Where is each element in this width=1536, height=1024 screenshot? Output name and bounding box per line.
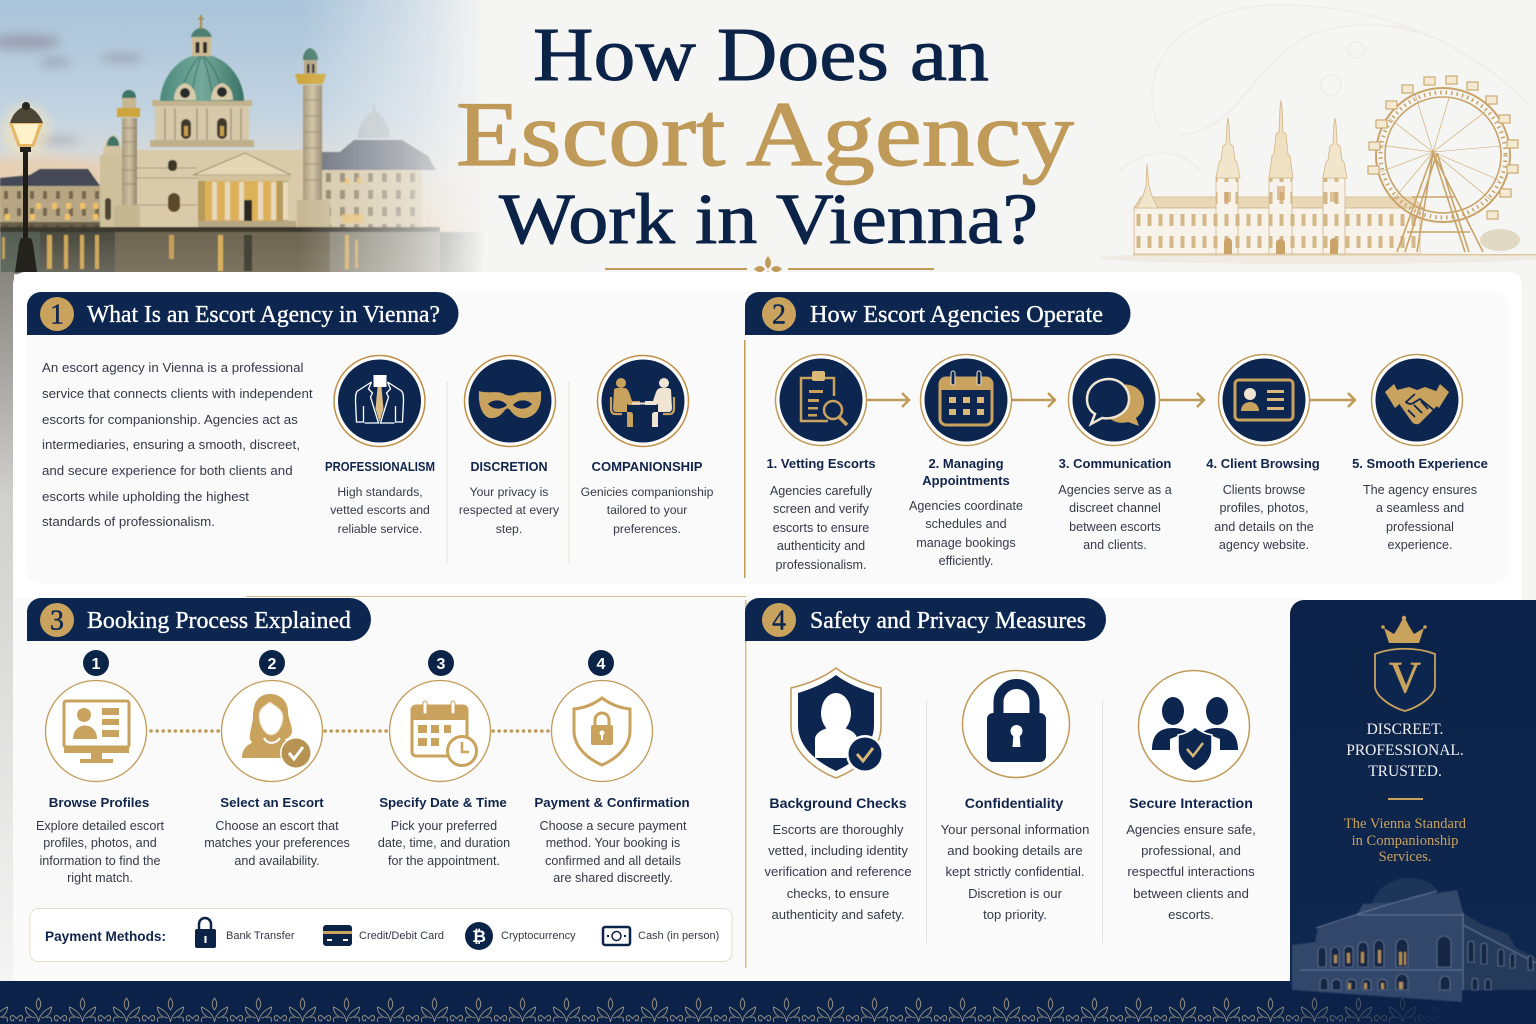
icon: shield with person — [791, 668, 884, 778]
intro paragraph: and secure experience for both clients and — [42, 463, 293, 478]
arrow — [866, 393, 909, 407]
step: select an escort — [204, 650, 350, 868]
icon: banknote — [603, 927, 630, 945]
feature: discretion: respected at every — [459, 503, 560, 517]
feature: professionalism: PROFESSIONALISM — [325, 459, 435, 474]
tagline: TRUSTED. — [1368, 763, 1442, 780]
measure: secure interaction: Agencies ensure safe, — [1126, 822, 1256, 837]
right palace — [322, 170, 422, 228]
step 1: vetting escorts: professionalism. — [776, 558, 866, 572]
icon: padlock — [195, 918, 216, 948]
step: browse profiles: Browse Profiles — [49, 795, 149, 810]
measure: secure interaction: between clients and — [1133, 886, 1249, 901]
step: payment and confirmation: are shared discreetly. — [553, 871, 673, 885]
step 1: vetting escorts: 1. Vetting Escorts — [766, 456, 876, 471]
payment methods box — [30, 908, 732, 962]
measure: confidentiality — [941, 670, 1089, 922]
gold subtitle — [1344, 816, 1467, 865]
intro paragraph: escorts while upholding the highest — [42, 489, 249, 504]
intro paragraph: standards of professionalism. — [42, 514, 215, 529]
icon: two people at table — [598, 356, 688, 446]
feature: professionalism — [325, 356, 435, 536]
step: select an escort: and availability. — [234, 854, 320, 868]
intro paragraph: An escort agency in Vienna is a professional — [42, 360, 303, 375]
section 2 heading: 2 — [772, 300, 786, 330]
icon: clipboard — [776, 354, 866, 446]
measure: confidentiality: and booking details are — [947, 843, 1083, 858]
water with reflections — [0, 232, 500, 274]
step 5: smooth experience: experience. — [1387, 538, 1453, 552]
step 5: smooth experience: 5. Smooth Experience — [1352, 456, 1488, 471]
section 4 heading — [745, 598, 1106, 641]
step: specify date and time: date, time, and duration — [378, 836, 510, 850]
icon: calendar and clock — [390, 680, 490, 782]
step 5: smooth experience: professional — [1386, 520, 1454, 534]
measure: secure interaction — [1126, 670, 1256, 922]
step 1: vetting escorts: Agencies carefully — [770, 484, 873, 498]
step: select an escort: 2 — [268, 656, 277, 673]
panel: section 4 — [745, 598, 1256, 968]
intro paragraph — [42, 360, 313, 529]
title: Work in Vienna? — [499, 179, 1038, 259]
ferris wheel — [1372, 88, 1510, 252]
gold subtitle: Services. — [1379, 849, 1431, 865]
step: payment and confirmation: Payment & Confirmation — [534, 795, 690, 810]
wheel cabins — [1368, 76, 1518, 219]
night palace illustration — [1292, 878, 1536, 1002]
step 4: client browsing: Clients browse — [1223, 483, 1305, 497]
rathaus building — [1134, 100, 1423, 254]
feature: companionship: preferences. — [613, 522, 681, 536]
quay — [0, 227, 440, 232]
left edge shade — [0, 272, 14, 982]
step 2: managing appointments: Agencies coordinate — [909, 499, 1023, 513]
intro paragraph: escorts for companionship. Agencies act as — [42, 412, 298, 427]
title — [456, 13, 1074, 259]
city line art: Rathaus and Riesenrad — [1100, 5, 1536, 264]
bottom ornamental band — [0, 981, 1536, 1024]
step 3: communication: Agencies serve as a — [1058, 483, 1172, 497]
drum — [154, 106, 250, 140]
section 3 heading — [27, 598, 371, 641]
step 3: communication: and clients. — [1083, 538, 1147, 552]
arrow — [1011, 393, 1055, 407]
step: payment and confirmation: Choose a secure payment — [539, 819, 687, 833]
icon: monitor profile — [46, 680, 146, 782]
dome — [160, 54, 244, 101]
measure: secure interaction: respectful interactions — [1127, 864, 1255, 879]
arrow — [1310, 393, 1355, 407]
payment methods box: Cryptocurrency — [501, 930, 576, 942]
title: Escort Agency — [456, 83, 1074, 185]
lower panel background — [13, 598, 1303, 982]
step 3: communication: between escorts — [1069, 520, 1161, 534]
feature: companionship: COMPANIONSHIP — [592, 459, 703, 474]
tagline: PROFESSIONAL. — [1346, 742, 1464, 759]
main card — [13, 272, 1522, 984]
step: browse profiles — [36, 650, 165, 885]
step: browse profiles: 1 — [92, 656, 101, 673]
icon: crown — [1381, 616, 1427, 643]
measure: confidentiality: top priority. — [983, 907, 1047, 922]
step 5: smooth experience: The agency ensures — [1363, 483, 1477, 497]
icon: bitcoin — [465, 922, 493, 950]
payment methods box: Credit/Debit Card — [359, 930, 444, 942]
icon: padlock — [962, 670, 1070, 778]
icon: shield with lock — [552, 680, 652, 782]
feature: discretion: step. — [496, 522, 522, 536]
step 2: managing appointments — [909, 354, 1023, 568]
step: specify date and time: for the appointment. — [388, 854, 500, 868]
ground haze — [1100, 252, 1536, 264]
feature: professionalism: High standards, — [337, 485, 423, 499]
icon: id card — [1218, 354, 1310, 446]
section 2 heading — [745, 292, 1130, 335]
feature: discretion: Your privacy is — [470, 485, 548, 499]
feature: companionship: Genicies companionship — [581, 485, 714, 499]
measure: secure interaction: Secure Interaction — [1129, 796, 1253, 812]
step: select an escort: Choose an escort that — [215, 819, 339, 833]
feature: professionalism: reliable service. — [338, 522, 422, 536]
title: How Does an — [533, 13, 989, 97]
step: select an escort: matches your preferences — [204, 836, 350, 850]
measure: background checks: checks, to ensure — [787, 886, 889, 901]
measure: confidentiality: kept strictly confidential. — [946, 864, 1084, 879]
photo: Karlskirche at dusk — [0, 0, 500, 274]
step 1: vetting escorts: escorts to ensure — [773, 521, 869, 535]
tagline: DISCREET. — [1367, 721, 1443, 738]
payment methods box: Cash (in person) — [638, 930, 719, 942]
gold subtitle: The Vienna Standard — [1344, 816, 1467, 832]
section 3 heading: Booking Process Explained — [87, 608, 351, 634]
portico — [193, 153, 291, 175]
step 4: client browsing: profiles, photos, — [1220, 501, 1308, 515]
panel: brand sidebar — [1290, 600, 1536, 1002]
icon: V shield crest: V — [1389, 653, 1421, 702]
measure: secure interaction: professional, and — [1141, 843, 1241, 858]
connector dots — [325, 729, 388, 733]
lantern — [192, 37, 211, 56]
step: browse profiles: profiles, photos, and — [43, 836, 157, 850]
step 2: managing appointments: 2. Managing — [928, 456, 1004, 471]
step 4: client browsing: and details on the — [1214, 520, 1314, 534]
icon: speech bubbles — [1068, 354, 1160, 446]
title ornament — [605, 256, 934, 282]
upper panel background — [27, 292, 1508, 584]
step: specify date and time: Pick your preferred — [391, 819, 497, 833]
icon: credit card — [323, 925, 352, 946]
feature: professionalism: vetted escorts and — [330, 503, 430, 517]
section 1 heading: 1 — [50, 300, 64, 330]
icon: calendar — [920, 354, 1012, 446]
feature: discretion: DISCRETION — [470, 459, 548, 474]
step 2: managing appointments: Appointments — [922, 473, 1010, 488]
measure: background checks: authenticity and safety. — [772, 907, 904, 922]
measure: background checks — [764, 668, 912, 922]
step: specify date and time: Specify Date & Time — [379, 795, 507, 810]
feature: discretion — [459, 356, 560, 536]
decorative swirls — [1120, 5, 1530, 170]
feature: companionship — [581, 356, 714, 536]
step 4: client browsing: agency website. — [1219, 538, 1309, 552]
step 5: smooth experience: a seamless and — [1376, 501, 1464, 515]
arrow — [1160, 393, 1204, 407]
step 3: communication: discreet channel — [1069, 501, 1161, 515]
section 3 heading: 3 — [50, 606, 64, 636]
right column — [303, 85, 322, 201]
step 4: client browsing — [1206, 354, 1320, 552]
step: specify date and time — [378, 650, 510, 868]
icon: bitcoin: ₿ — [472, 927, 486, 946]
step 2: managing appointments: efficiently. — [939, 554, 993, 568]
panel: section 3 — [27, 598, 732, 962]
step: select an escort: Select an Escort — [220, 795, 324, 810]
step 3: communication — [1058, 354, 1172, 552]
step 1: vetting escorts: screen and verify — [773, 502, 870, 516]
measure: confidentiality: Confidentiality — [965, 796, 1063, 812]
icon: mask — [464, 356, 556, 446]
measure: background checks: vetted, including identity — [768, 843, 908, 858]
street lamp — [2, 102, 50, 272]
panel: section 1 — [27, 292, 714, 564]
section 2 heading: How Escort Agencies Operate — [810, 302, 1103, 328]
panel: section 2 — [744, 292, 1488, 578]
icon: handshake — [1372, 354, 1462, 446]
step: payment and confirmation: confirmed and all details — [545, 854, 681, 868]
step 5: smooth experience — [1352, 354, 1488, 552]
tagline — [1346, 721, 1464, 780]
measure: confidentiality: Your personal information — [941, 822, 1089, 837]
step: browse profiles: right match. — [67, 871, 133, 885]
step: browse profiles: Explore detailed escort — [36, 819, 165, 833]
icon: two people and shield — [1138, 670, 1250, 782]
section 1 heading — [27, 292, 458, 335]
gold subtitle: in Companionship — [1352, 833, 1458, 849]
payment methods box: Bank Transfer — [226, 930, 295, 942]
step: payment and confirmation: method. Your booking is — [546, 836, 680, 850]
step: browse profiles: information to find the — [39, 854, 161, 868]
measure: secure interaction: escorts. — [1168, 907, 1214, 922]
intro paragraph: service that connects clients with independent — [42, 386, 313, 401]
icon: suit — [334, 356, 425, 446]
step 4: client browsing: 4. Client Browsing — [1206, 456, 1320, 471]
section 1 heading: What Is an Escort Agency in Vienna? — [87, 302, 440, 328]
step: specify date and time: 3 — [437, 656, 446, 673]
step: payment and confirmation: 4 — [597, 656, 606, 673]
icon: woman with check — [222, 680, 322, 782]
arched lit windows — [1318, 936, 1533, 990]
connector dots — [151, 729, 221, 733]
main body — [137, 150, 303, 228]
payment methods box: Payment Methods: — [45, 929, 166, 944]
step 1: vetting escorts: authenticity and — [777, 539, 865, 553]
measure: background checks: Escorts are thoroughly — [772, 822, 904, 837]
step: payment and confirmation — [534, 650, 690, 885]
connector dots — [493, 729, 551, 733]
section 4 heading: 4 — [772, 606, 786, 636]
measure: background checks: Background Checks — [769, 796, 907, 812]
section 4 heading: Safety and Privacy Measures — [810, 608, 1086, 634]
step 3: communication: 3. Communication — [1059, 456, 1171, 471]
step 2: managing appointments: manage bookings — [916, 536, 1016, 550]
measure: confidentiality: Discretion is our — [968, 886, 1063, 901]
left column — [122, 118, 137, 206]
intro paragraph: intermediaries, ensuring a smooth, discreet, — [42, 437, 300, 452]
step 2: managing appointments: schedules and — [925, 517, 1007, 531]
measure: background checks: verification and reference — [764, 864, 912, 879]
feature: companionship: tailored to your — [607, 503, 687, 517]
icon: V shield crest — [1375, 649, 1435, 711]
step 1: vetting escorts — [766, 354, 876, 572]
left palace — [0, 184, 100, 228]
